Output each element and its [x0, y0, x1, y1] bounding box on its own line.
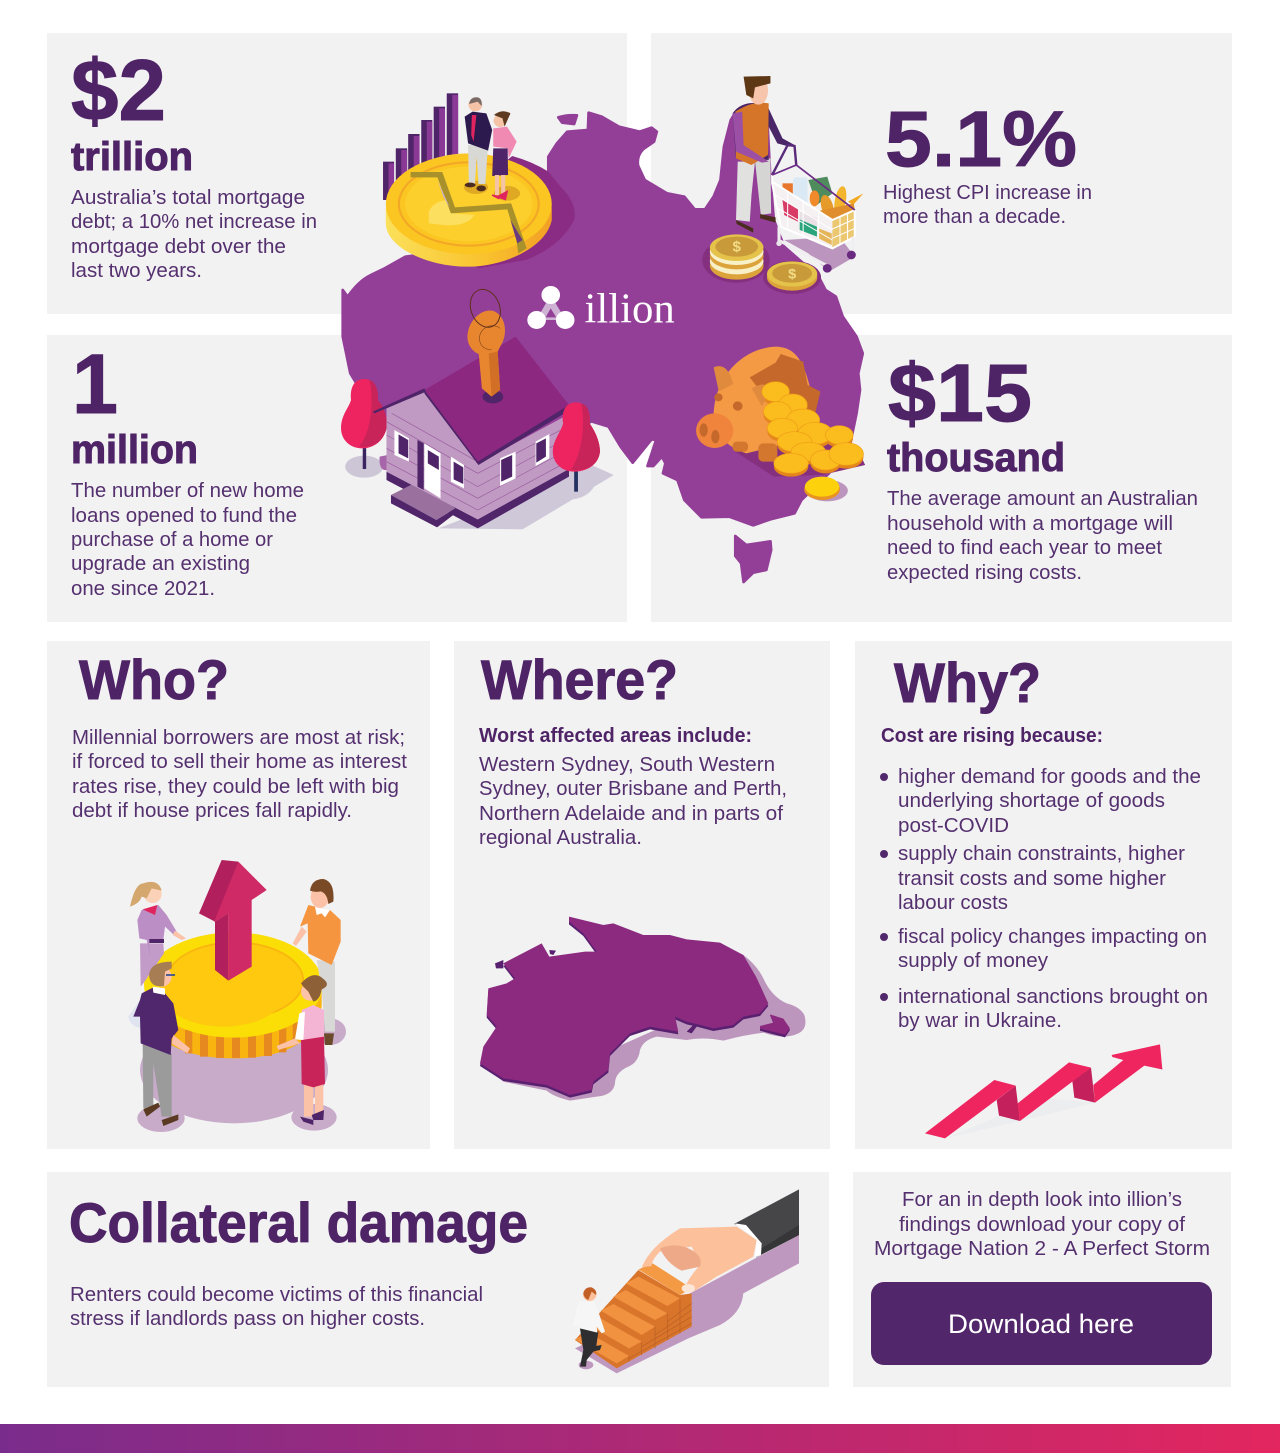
panel: download: [853, 1172, 1231, 1387]
stat: 1 million: [71, 337, 304, 600]
man orange: [293, 879, 341, 1045]
description: The number of new home: [71, 480, 304, 502]
woman: [492, 111, 520, 201]
text: who description: debt if house prices fall rapidly.: [72, 800, 352, 822]
trolley: [772, 145, 796, 175]
button: download here: Download here: [948, 1309, 1134, 1339]
icon: rising arrow: [925, 1044, 1162, 1138]
list: reasons: international sanctions brought on: [898, 986, 1208, 1008]
text: collateral description: stress if landlords pass on higher costs.: [70, 1308, 425, 1330]
list: reasons: labour costs: [898, 892, 1008, 914]
list: reasons: underlying shortage of goods: [898, 790, 1165, 812]
description: [71, 187, 317, 282]
central map illustration: [341, 76, 865, 582]
panel: new home loans: [47, 335, 627, 622]
panel: CPI increase: [651, 33, 1232, 314]
description: [883, 182, 1092, 228]
text: where description: Northern Adelaide and in parts of: [479, 803, 783, 825]
map: affected areas: [480, 917, 805, 1101]
description: debt; a 10% net increase in: [71, 211, 317, 233]
unit: million: [71, 428, 198, 472]
description: expected rising costs.: [887, 562, 1082, 584]
value: 1: [72, 337, 118, 431]
text: who description: if forced to sell their home as interest: [72, 751, 407, 773]
stat: $2 trillion: [71, 43, 317, 282]
description: more than a decade.: [883, 206, 1066, 228]
roof: [424, 337, 569, 464]
text: who description: rates rise, they could be left with big: [72, 776, 399, 798]
text: where description: regional Australia.: [479, 827, 642, 849]
panel: collateral damage: [47, 1172, 829, 1387]
walls: [386, 392, 567, 519]
icon: house with key and trees: [341, 286, 614, 529]
coin: [144, 983, 322, 1058]
list: reasons: fiscal policy changes impacting on: [898, 926, 1207, 948]
description: loans opened to fund the: [71, 505, 297, 527]
tree left: [341, 379, 387, 469]
coins: [702, 237, 770, 283]
text: where description: Western Sydney, South Western: [479, 754, 775, 776]
text: where description: Worst affected areas include:: [479, 725, 752, 747]
stat: $15 thousand: [887, 348, 1198, 584]
icon: shopper with trolley: $: [788, 267, 796, 282]
list: reasons: supply chain constraints, higher: [898, 843, 1185, 865]
icon: hand placing stairs: [573, 1189, 799, 1373]
illion logo: illion: [584, 285, 675, 333]
text: why lead: Cost are rising because:: [881, 725, 1103, 747]
list: reasons: post-COVID: [898, 815, 1009, 837]
panel: mortgage debt: [47, 33, 627, 314]
description: need to find each year to meet: [887, 537, 1162, 559]
text: download prompt: Mortgage Nation 2 - A Perfect Storm: [874, 1238, 1210, 1260]
stat: 5.1%: [883, 94, 1092, 228]
description: mortgage debt over the: [71, 236, 286, 258]
footer gradient bar: [0, 1424, 1280, 1453]
heading: where: Where?: [481, 648, 678, 711]
windows and door: [394, 430, 409, 462]
description: last two years.: [71, 260, 202, 282]
panel: why: [855, 641, 1232, 1149]
description: purchase of a home or: [71, 529, 273, 551]
list: reasons: [880, 766, 1208, 1032]
unit: trillion: [71, 135, 193, 179]
text: where description: [479, 725, 787, 849]
man: [736, 162, 755, 222]
text: collateral description: [70, 1284, 483, 1330]
icon: gold coin with bars and couple: [383, 93, 575, 268]
panel: who: [47, 641, 430, 1149]
text: download prompt: findings download your copy of: [899, 1214, 1185, 1236]
text: who description: Millennial borrowers are most at risk;: [72, 727, 405, 749]
text: download prompt: For an in depth look into illion’s: [902, 1189, 1182, 1211]
heading: why: Why?: [894, 651, 1041, 714]
key: [483, 390, 503, 403]
list: reasons: supply of money: [898, 950, 1048, 972]
panel: where: [454, 641, 830, 1149]
panel: rising costs: [651, 335, 1232, 622]
button: download here: [871, 1282, 1212, 1365]
text: download prompt: [874, 1189, 1210, 1260]
list: reasons: higher demand for goods and the: [898, 766, 1201, 788]
man: [580, 1328, 598, 1367]
text: who description: [72, 727, 407, 822]
man purple front: [133, 962, 190, 1126]
value: $15: [888, 348, 1032, 439]
description: one since 2021.: [71, 578, 215, 600]
icon: people around coin with arrow: [128, 860, 346, 1132]
value: $2: [71, 43, 166, 139]
list: reasons: by war in Ukraine.: [898, 1010, 1062, 1032]
description: upgrade an existing: [71, 553, 250, 575]
arrow: [199, 860, 238, 922]
heading: collateral damage: Collateral damage: [69, 1191, 528, 1254]
house base: [386, 468, 569, 528]
description: The average amount an Australian: [887, 488, 1198, 510]
description: Australia’s total mortgage: [71, 187, 305, 209]
description: Highest CPI increase in: [883, 182, 1092, 204]
man: [464, 97, 492, 194]
value: 5.1%: [885, 94, 1077, 183]
description: [71, 480, 304, 600]
description: [887, 488, 1198, 584]
text: collateral description: Renters could become victims of this financial: [70, 1284, 483, 1306]
unit: thousand: [887, 436, 1065, 480]
icon: shopper with trolley: [702, 76, 863, 294]
hand: [642, 1227, 757, 1292]
woman back left: [130, 882, 186, 987]
tree right: [553, 402, 600, 492]
text: where description: Sydney, outer Brisbane and Perth,: [479, 778, 787, 800]
list: reasons: transit costs and some higher: [898, 868, 1166, 890]
illion logo: [527, 285, 675, 333]
stairs: [575, 1270, 692, 1368]
icon: piggy bank with coins: [696, 347, 865, 501]
icon: shopper with trolley: $: [732, 240, 742, 256]
map of Australia: [343, 112, 863, 582]
description: household with a mortgage will: [887, 513, 1173, 535]
woman front right: [277, 975, 327, 1125]
heading: who: Who?: [79, 648, 229, 711]
